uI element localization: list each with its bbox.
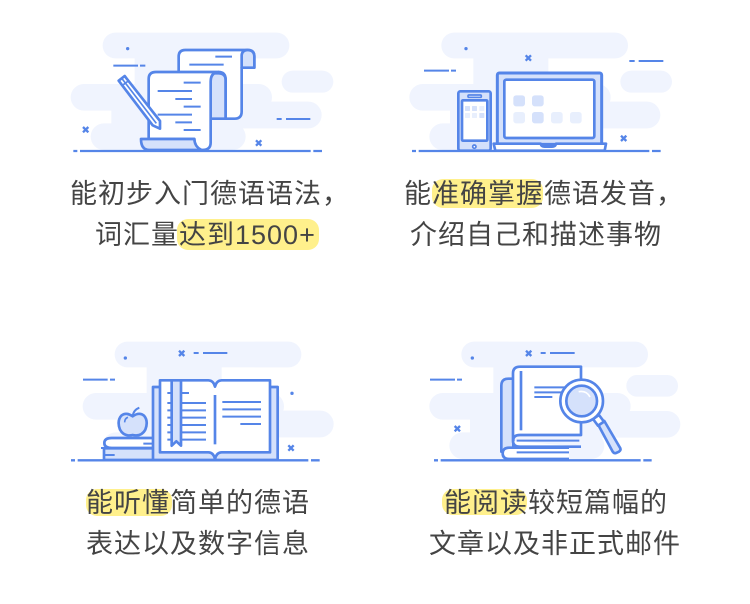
line 1: 能听懂简单的德语 [86,488,310,518]
decorative marks [83,351,294,451]
books under apple [101,438,153,460]
panel: magnifier and books illustration [429,342,680,460]
line 2: 文章以及非正式邮件 [429,529,681,559]
decorative marks [430,351,575,431]
background clouds [71,33,333,150]
text block: reading goal [429,488,681,559]
panel: open book illustration [71,342,334,460]
highlight [86,489,172,516]
books [501,367,581,459]
ground line [434,457,652,464]
line 2: 词汇量达到1500+ [95,220,316,250]
text block: listening goal [86,488,310,559]
back scroll [179,50,254,119]
ground line [412,147,661,154]
background clouds [429,342,680,459]
highlight [442,489,527,515]
text block: pronunciation goal [404,179,684,250]
phone [458,91,491,151]
front scroll [141,72,226,150]
text block: writing goal [70,179,350,250]
background clouds [83,342,334,459]
ground line [71,457,320,464]
ground line [73,147,322,154]
line 1: 能初步入门德语语法， [70,179,350,209]
line 2: 介绍自己和描述事物 [410,220,662,250]
panel: devices illustration [409,33,672,151]
line 2: 表达以及数字信息 [86,529,310,559]
line 1: 能准确掌握德语发音， [404,179,684,209]
panel: writing scrolls illustration [71,33,333,151]
line 1: 能阅读较短篇幅的 [444,488,668,518]
pencil [119,76,160,129]
laptop [494,73,606,151]
magnifying glass [560,380,620,453]
decorative marks [424,47,663,141]
highlight [177,219,319,250]
open book [153,380,278,460]
highlight [432,179,543,208]
background clouds [409,33,672,150]
apple [119,408,147,435]
decorative marks [83,47,310,146]
